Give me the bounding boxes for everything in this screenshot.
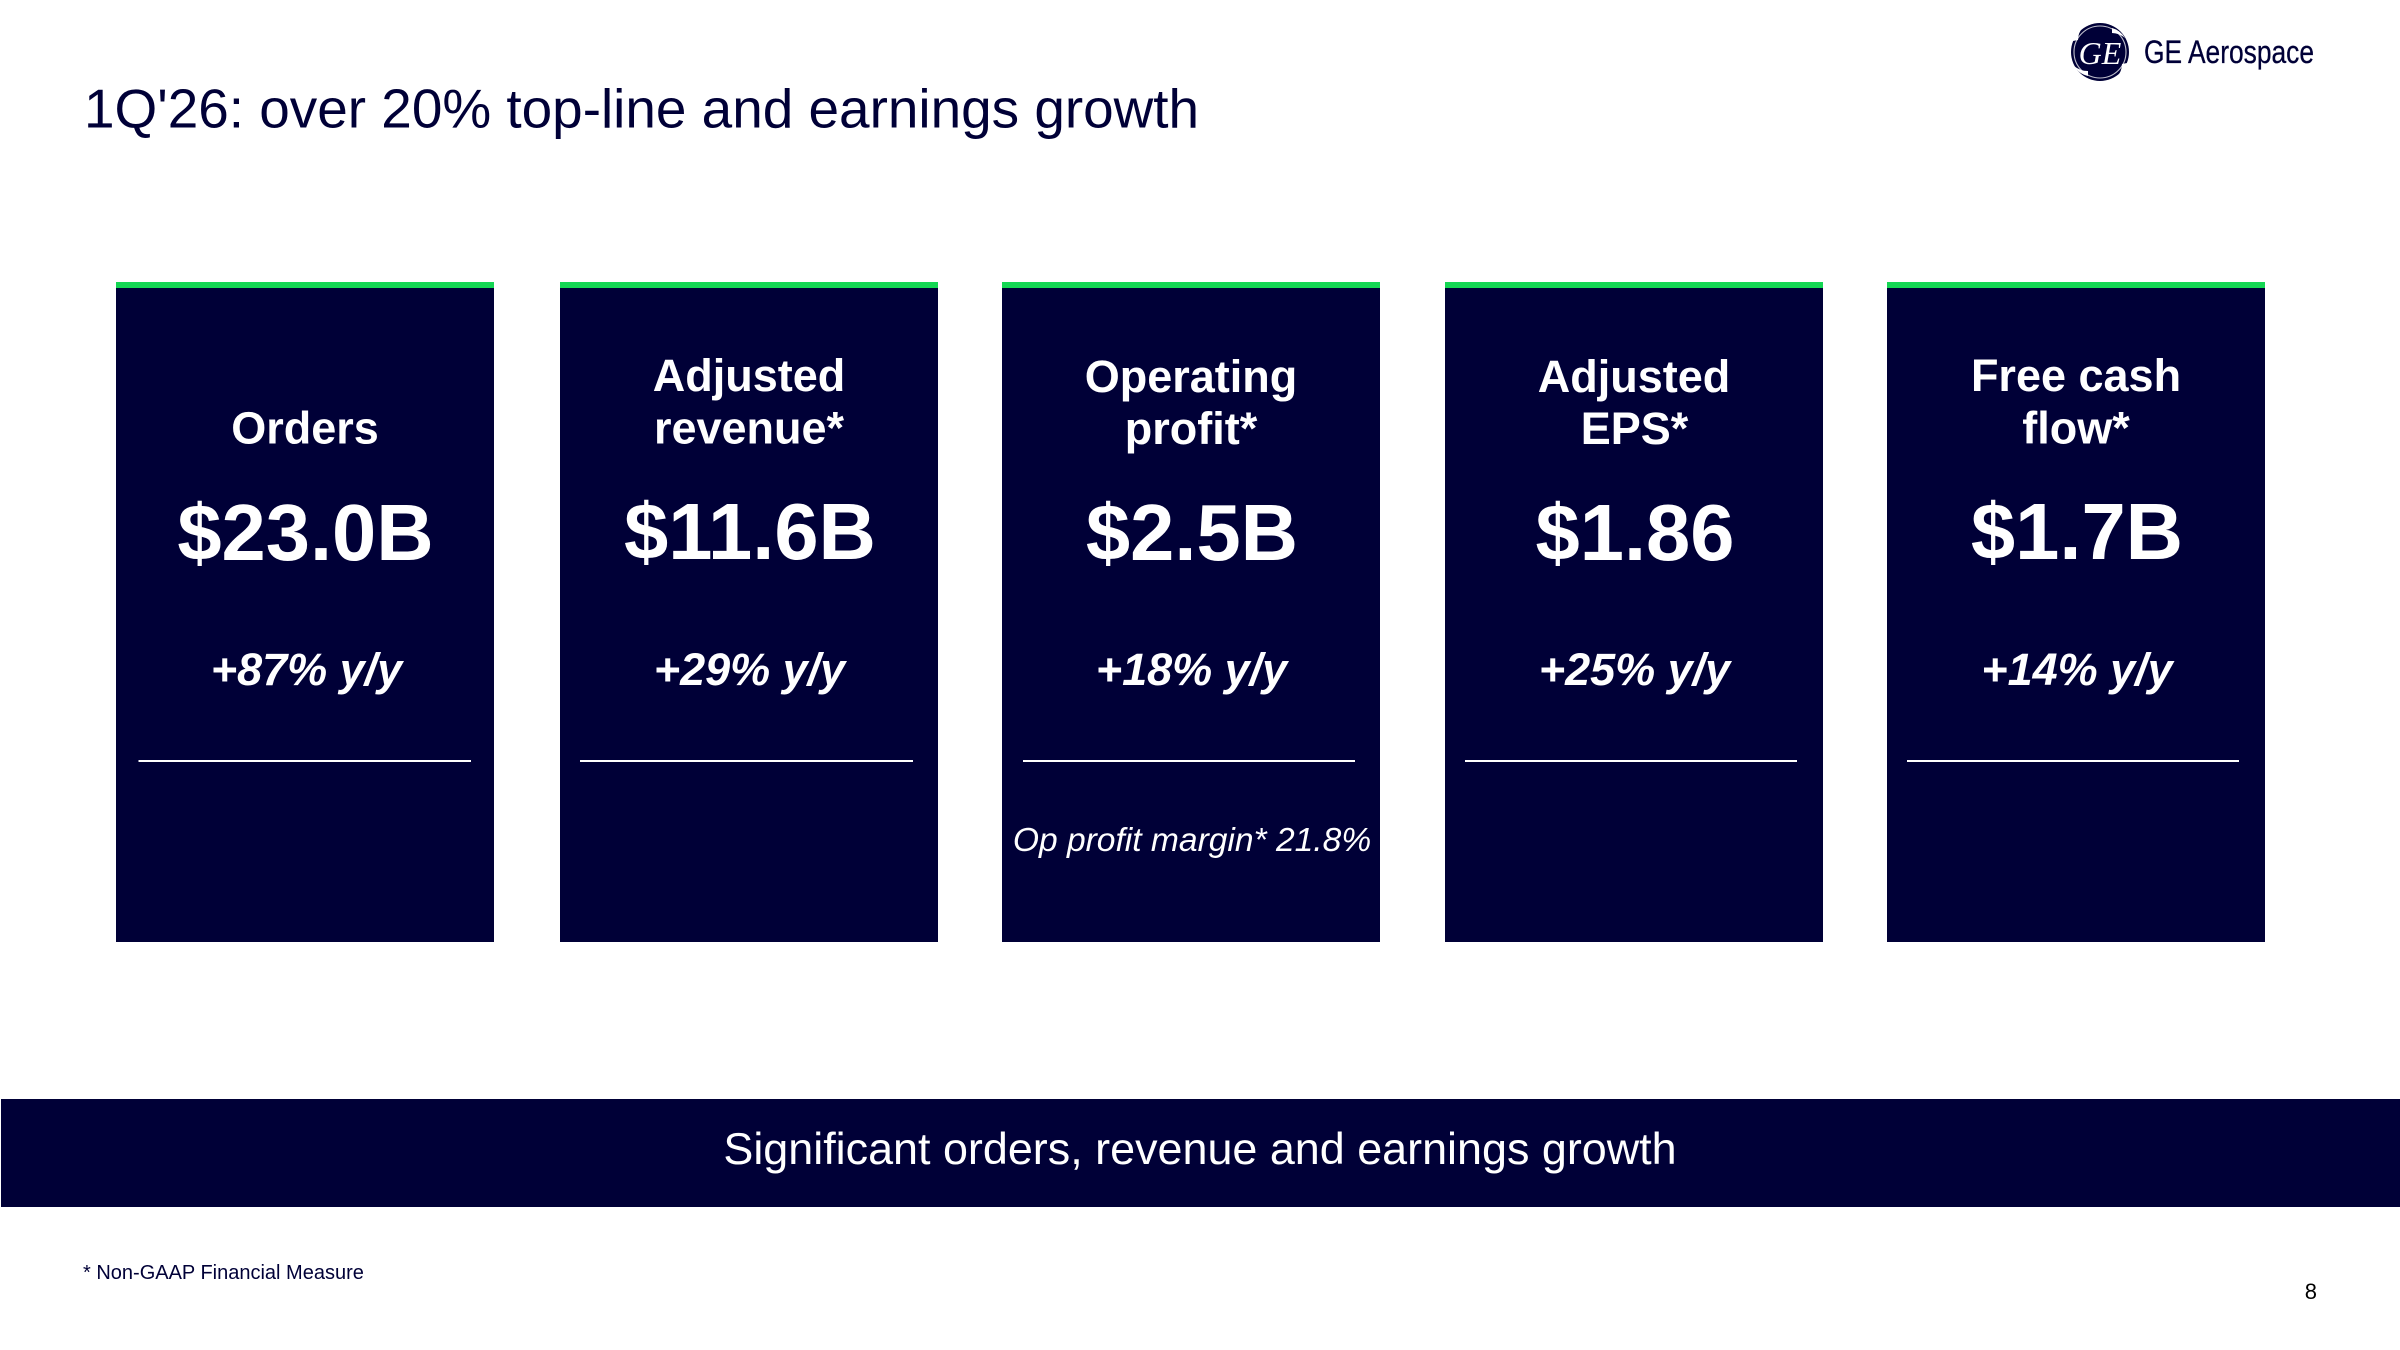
change: operating profit: +18% y/y [1096, 644, 1289, 695]
label: adjusted revenue: revenue* [654, 402, 845, 454]
value: orders: $23.0B [177, 488, 434, 577]
icon: GE monogram [2071, 23, 2129, 81]
icon: GE monogram: GE [2079, 35, 2122, 71]
footnote: * Non-GAAP Financial Measure [83, 1262, 364, 1284]
value: operating profit: $2.5B [1086, 488, 1298, 577]
change: orders: +87% y/y [211, 644, 404, 695]
value: adjusted EPS: $1.86 [1536, 488, 1734, 577]
page number: 8 [2305, 1279, 2317, 1304]
label: adjusted revenue: Adjusted [653, 350, 845, 401]
logo wordmark: GE Aerospace [2144, 34, 2314, 70]
op profit margin note: Op profit margin* 21.8% [1013, 822, 1371, 859]
change: adjusted EPS: +25% y/y [1539, 644, 1732, 695]
panel: adjusted EPS [1445, 282, 1823, 942]
panel: operating profit [1002, 282, 1380, 942]
label: operating profit: Operating [1085, 351, 1297, 402]
panel: orders [116, 282, 494, 942]
panel: free cash flow [1887, 282, 2265, 942]
change: free cash flow: +14% y/y [1981, 644, 2175, 695]
value: free cash flow: $1.7B [1971, 487, 2183, 576]
label: adjusted EPS: EPS* [1581, 403, 1689, 454]
banner [1, 1099, 2400, 1207]
label: adjusted EPS: Adjusted [1538, 351, 1730, 402]
label: free cash flow: flow* [2022, 402, 2130, 454]
banner text: Significant orders, revenue and earnings growth [723, 1123, 1677, 1174]
value: adjusted revenue: $11.6B [624, 487, 876, 576]
panel: adjusted revenue [560, 282, 938, 942]
logo: GE Aerospace [2071, 23, 2314, 81]
change: adjusted revenue: +29% y/y [654, 644, 847, 695]
label: free cash flow: Free cash [1971, 350, 2181, 401]
label: operating profit: profit* [1125, 403, 1258, 454]
title: 1Q'26: over 20% top-line and earnings growth [84, 78, 1199, 140]
label: orders: Orders [231, 402, 379, 454]
